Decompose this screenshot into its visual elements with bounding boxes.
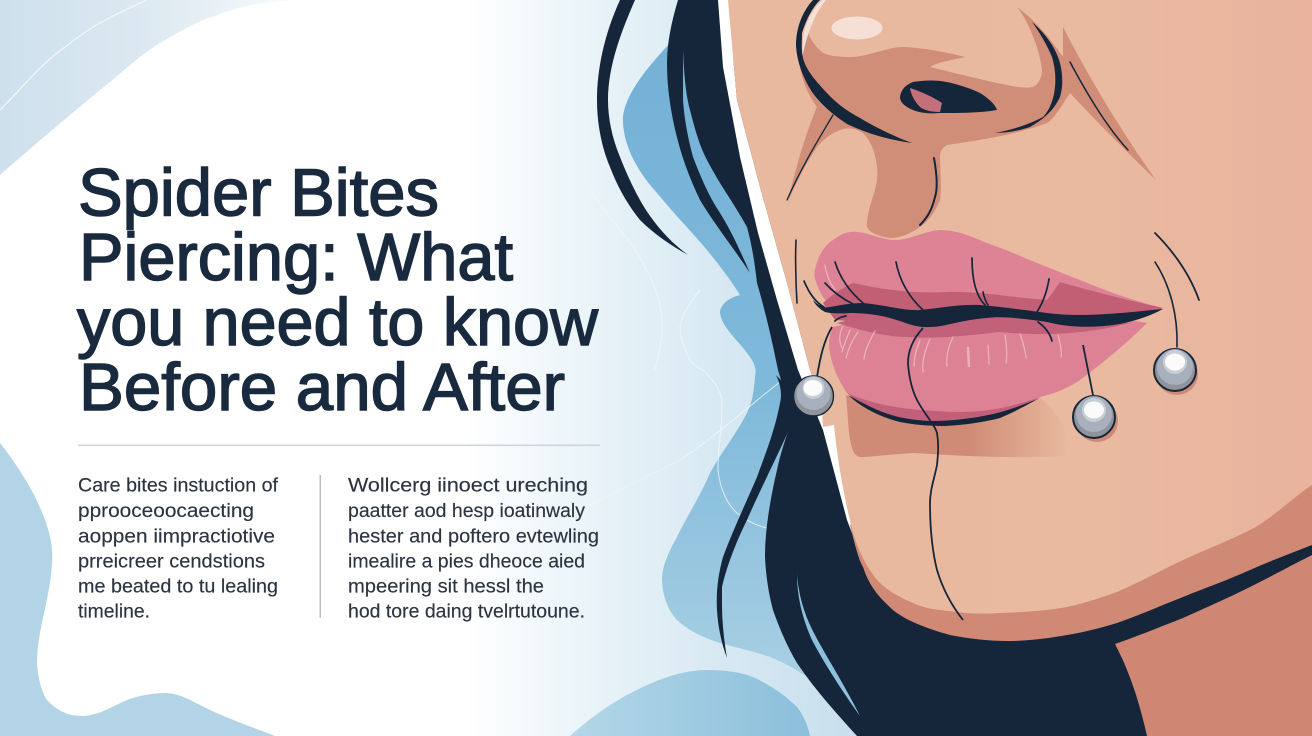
long crease down chin	[908, 328, 963, 620]
hair strand: inner	[667, 0, 750, 273]
column divider	[320, 475, 321, 618]
face crease lines	[787, 62, 1199, 347]
neck	[1115, 555, 1312, 736]
text block: left column: Care bites instuction of	[78, 476, 279, 496]
upper lip dark band	[823, 282, 1163, 328]
title divider	[78, 444, 600, 446]
lower lip	[829, 313, 1147, 423]
piercing ball: right	[1154, 349, 1198, 395]
title	[77, 156, 599, 425]
title: Piercing: What	[79, 220, 513, 295]
text block: right column	[348, 476, 599, 622]
text block: left column: timeline.	[78, 601, 150, 622]
decorative wave: bottom centre	[570, 670, 810, 736]
chin shadow	[846, 395, 1068, 457]
nose rim highlight	[802, 0, 826, 58]
text block: right column: hester and poftero evtewling	[348, 526, 599, 547]
text block: left column: me beated to tu lealing	[78, 577, 278, 598]
nose shadow	[788, 7, 1156, 238]
hair highlight: light sliver	[797, 574, 860, 716]
piercing ball: left	[794, 376, 834, 416]
piercing ball: middle	[1073, 396, 1118, 442]
text block: right column: imealire a pies dheoce aied	[348, 551, 585, 572]
piercing stems	[817, 327, 1093, 395]
lip bottom line	[848, 395, 1040, 426]
background panel	[0, 0, 860, 736]
hair strand: far left	[597, 0, 688, 255]
lip wrinkles	[804, 258, 1052, 341]
lips	[804, 230, 1163, 426]
lower lip dark band	[837, 312, 1130, 338]
text block: left column	[78, 476, 279, 622]
hair strand: long lower left	[717, 375, 795, 658]
decorative wave: bottom left	[0, 443, 275, 736]
text block: right column: paatter aod hesp ioatinwaly	[348, 501, 586, 522]
white skin outline	[718, 0, 880, 570]
title: you need to know	[77, 285, 599, 360]
decorative wave: behind hair	[623, 30, 830, 690]
upper lip	[814, 230, 1163, 327]
nose outline right	[995, 22, 1062, 133]
title: Spider Bites	[78, 156, 439, 230]
lower lip dark rim	[847, 393, 1040, 423]
nose highlight	[832, 16, 882, 40]
text block: right column: mpeering sit hessl the	[348, 577, 544, 598]
jaw shadow	[850, 470, 1312, 641]
text block: left column: prreicreer cendstions	[78, 551, 265, 572]
nose outline left	[796, 0, 912, 143]
face skin	[728, 0, 1312, 614]
hair	[597, 0, 1312, 736]
text block: right column: hod tore daing tvelrtutoune.	[348, 601, 585, 622]
text block: right column: Wollcerg iinoect ureching	[348, 476, 588, 496]
lip highlights	[825, 265, 1061, 372]
decorative thin lines	[590, 190, 780, 528]
hair: main mass	[683, 0, 1312, 736]
mouth line	[813, 300, 1163, 327]
decorative wave: top left	[0, 0, 300, 175]
nostril	[900, 80, 997, 113]
text block: left column: aoppen iimpractiotive	[78, 526, 275, 547]
title: Before and After	[79, 350, 565, 425]
text block: left column: pprooceoocaecting	[78, 501, 254, 522]
